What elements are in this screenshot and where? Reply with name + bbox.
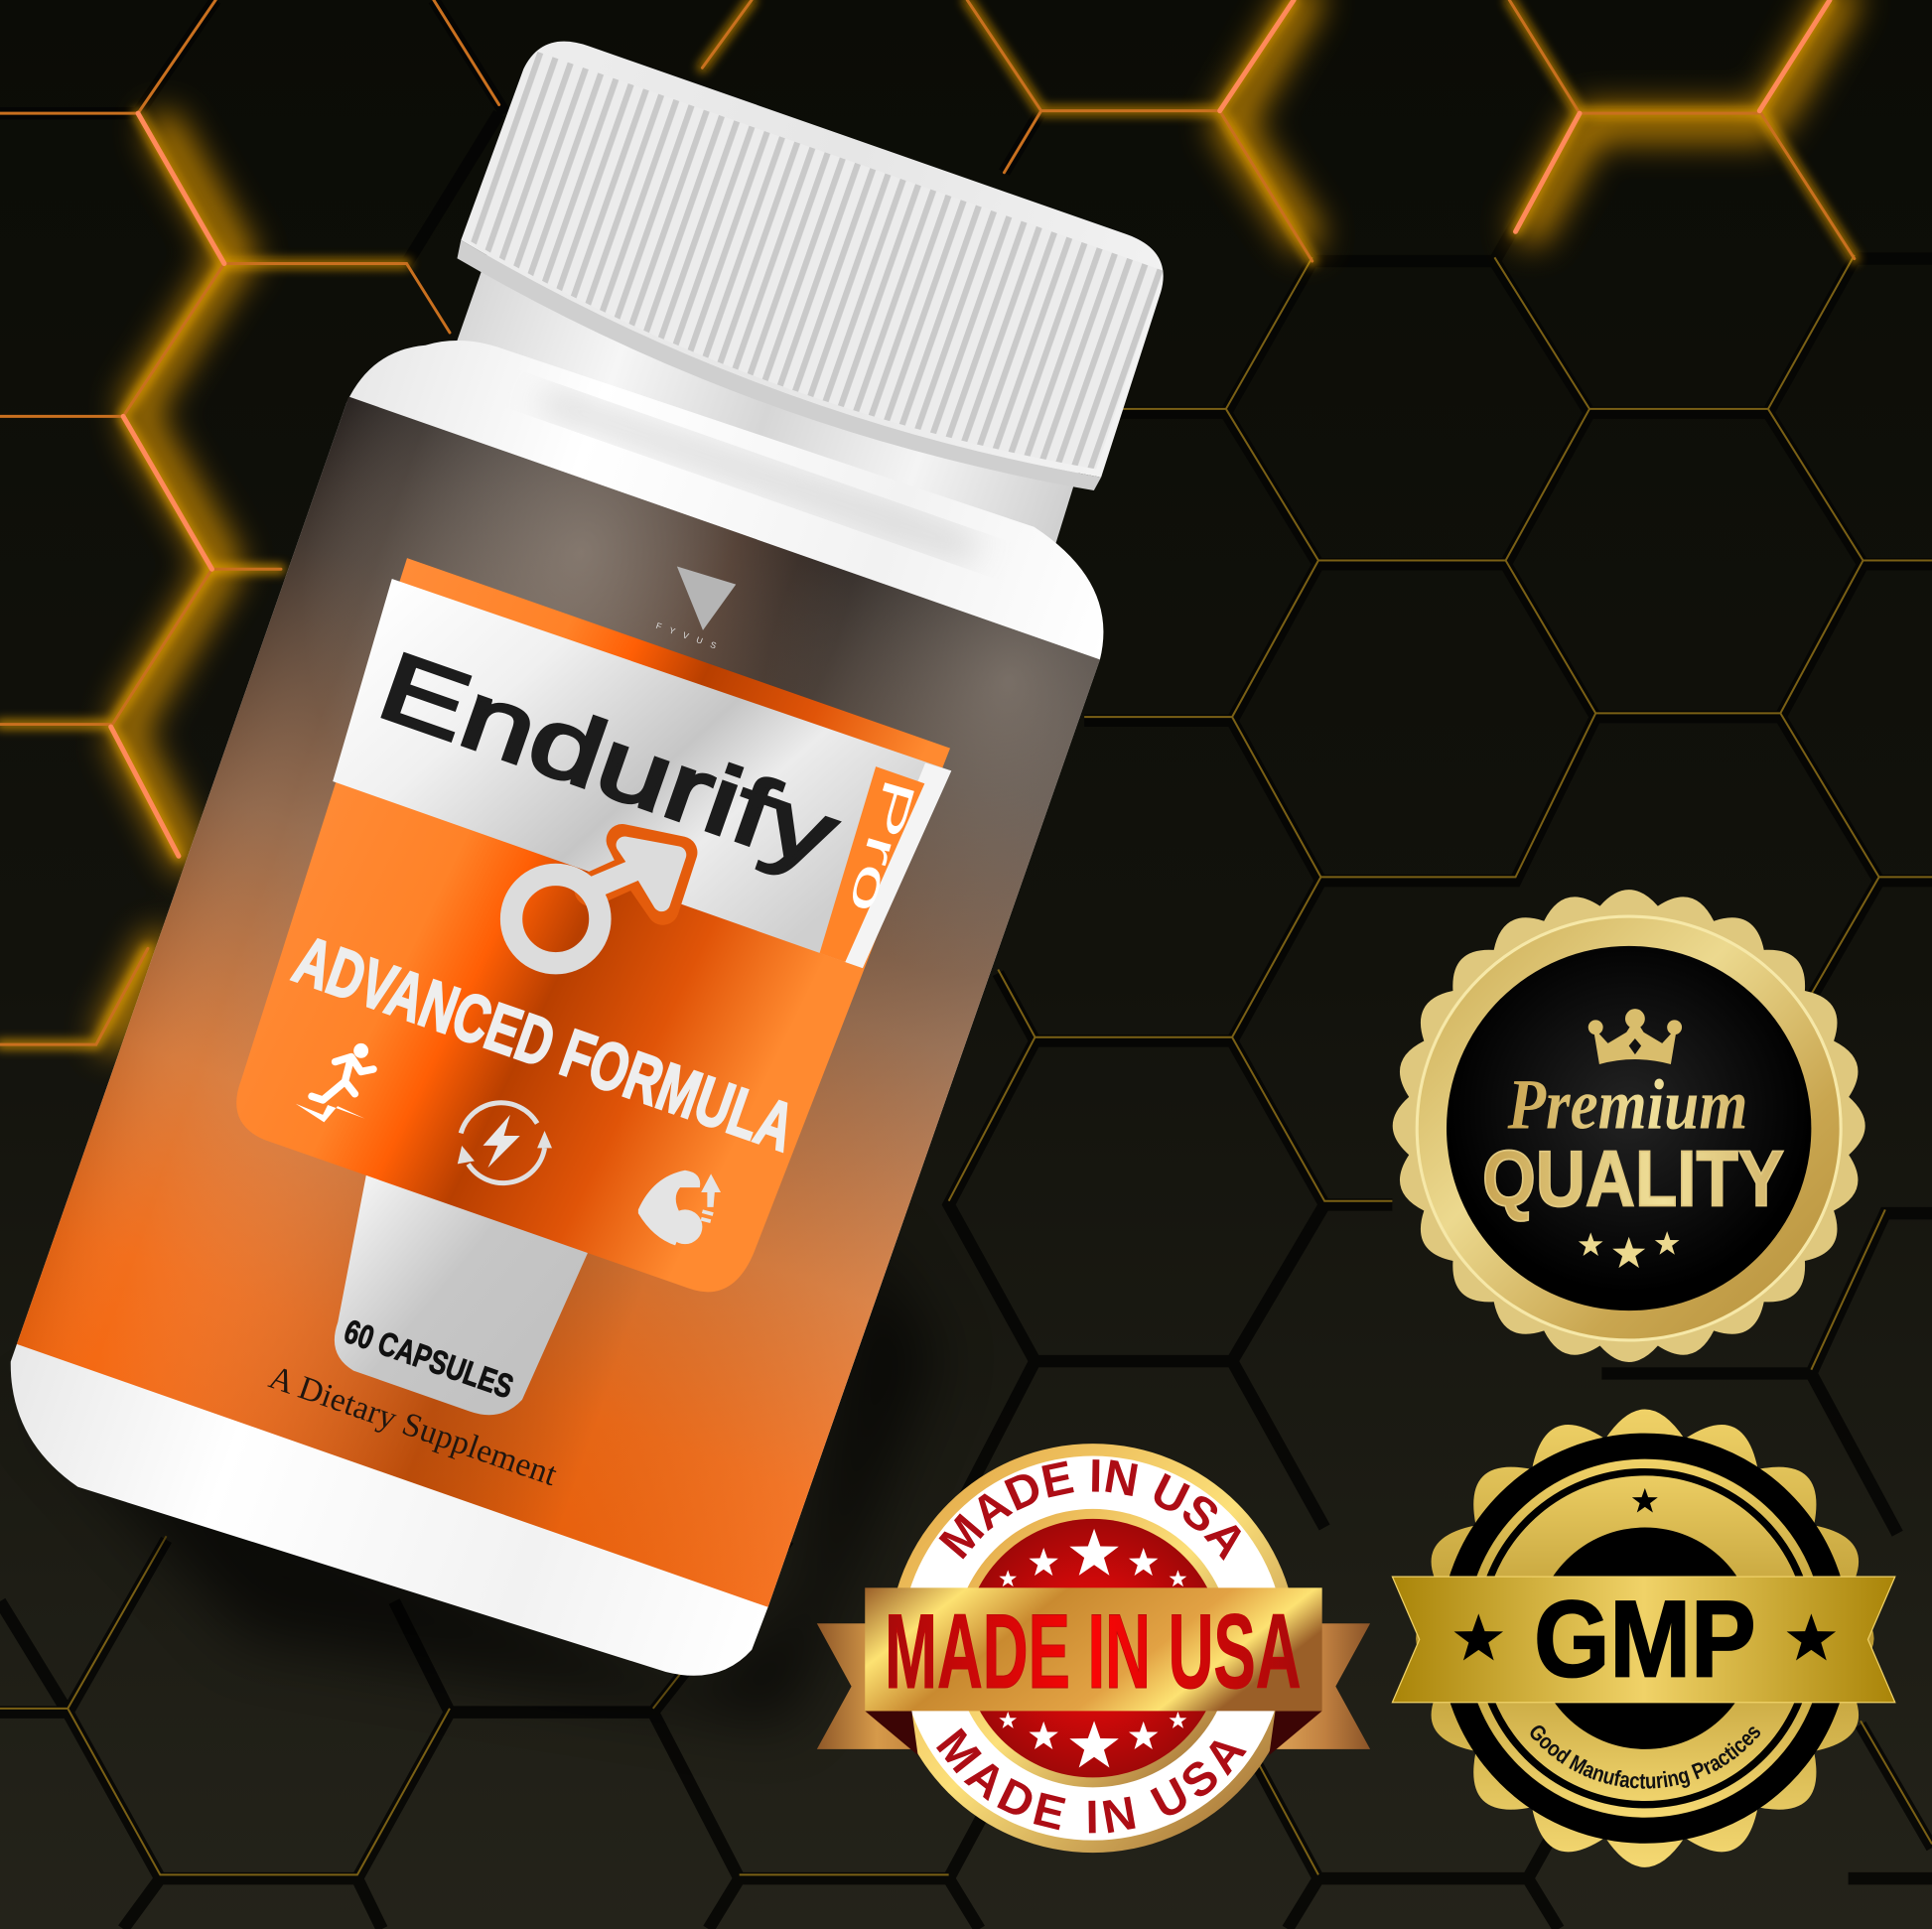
- badge: made in usa: [816, 1444, 1370, 1853]
- pro label: Pro: [839, 772, 924, 919]
- scalloped edge: [1393, 890, 1865, 1362]
- gmp text: GMP: [1534, 1580, 1756, 1701]
- orange panel: [209, 558, 950, 1310]
- capsules count: 60 CAPSULES: [340, 1313, 517, 1406]
- bottle cap: [443, 28, 1179, 516]
- three stars: [1579, 1231, 1680, 1268]
- brand name: Endurify: [366, 630, 851, 890]
- back ribbons: [817, 1623, 1370, 1749]
- badge: premium quality: [1393, 890, 1865, 1362]
- glowing hexagon edges: [0, 0, 1855, 1044]
- supplement note: A Dietary Supplement: [264, 1359, 562, 1493]
- pro tag: [811, 766, 924, 967]
- icon: muscle arm: [638, 1171, 721, 1245]
- pointed seal edge: [1416, 1410, 1874, 1867]
- arc text: Good Manufacturing Practices: [1531, 1725, 1760, 1789]
- icon: male symbol: [511, 840, 681, 963]
- side stars: [1454, 1613, 1836, 1661]
- top star: [1632, 1488, 1658, 1513]
- tab shape: [304, 1172, 589, 1431]
- red stars: [999, 1529, 1186, 1767]
- brand logo: [654, 564, 746, 653]
- quality text: QUALITY: [1482, 1135, 1784, 1223]
- crown: [1588, 1009, 1682, 1064]
- ring text: MADE IN USA: [936, 1727, 1247, 1833]
- product bottle: [0, 10, 1235, 1716]
- advanced formula: ADVANCED FORMULA: [285, 921, 804, 1166]
- brand logo: FYVUS: [654, 620, 726, 653]
- icon: energy cycle: [455, 1103, 552, 1183]
- ring text: MADE IN USA: [939, 1459, 1241, 1561]
- icon: runner: [296, 1043, 373, 1122]
- ring text: [936, 1459, 1247, 1833]
- bottle body: [0, 299, 1134, 1716]
- gmp banner: [1392, 1577, 1895, 1703]
- banner text: MADE IN USA: [885, 1591, 1302, 1711]
- bottle neck: [448, 238, 1091, 576]
- ribbon folds: [865, 1711, 1322, 1755]
- product label: [17, 397, 1100, 1607]
- premium text: Premium: [1507, 1065, 1747, 1145]
- badge: gmp: [1392, 1410, 1896, 1867]
- bottle shadow: [25, 1232, 936, 1724]
- front banner: [865, 1587, 1322, 1711]
- white name band: [322, 576, 951, 974]
- shoulder shading: [539, 388, 978, 562]
- white side strip: [844, 758, 951, 974]
